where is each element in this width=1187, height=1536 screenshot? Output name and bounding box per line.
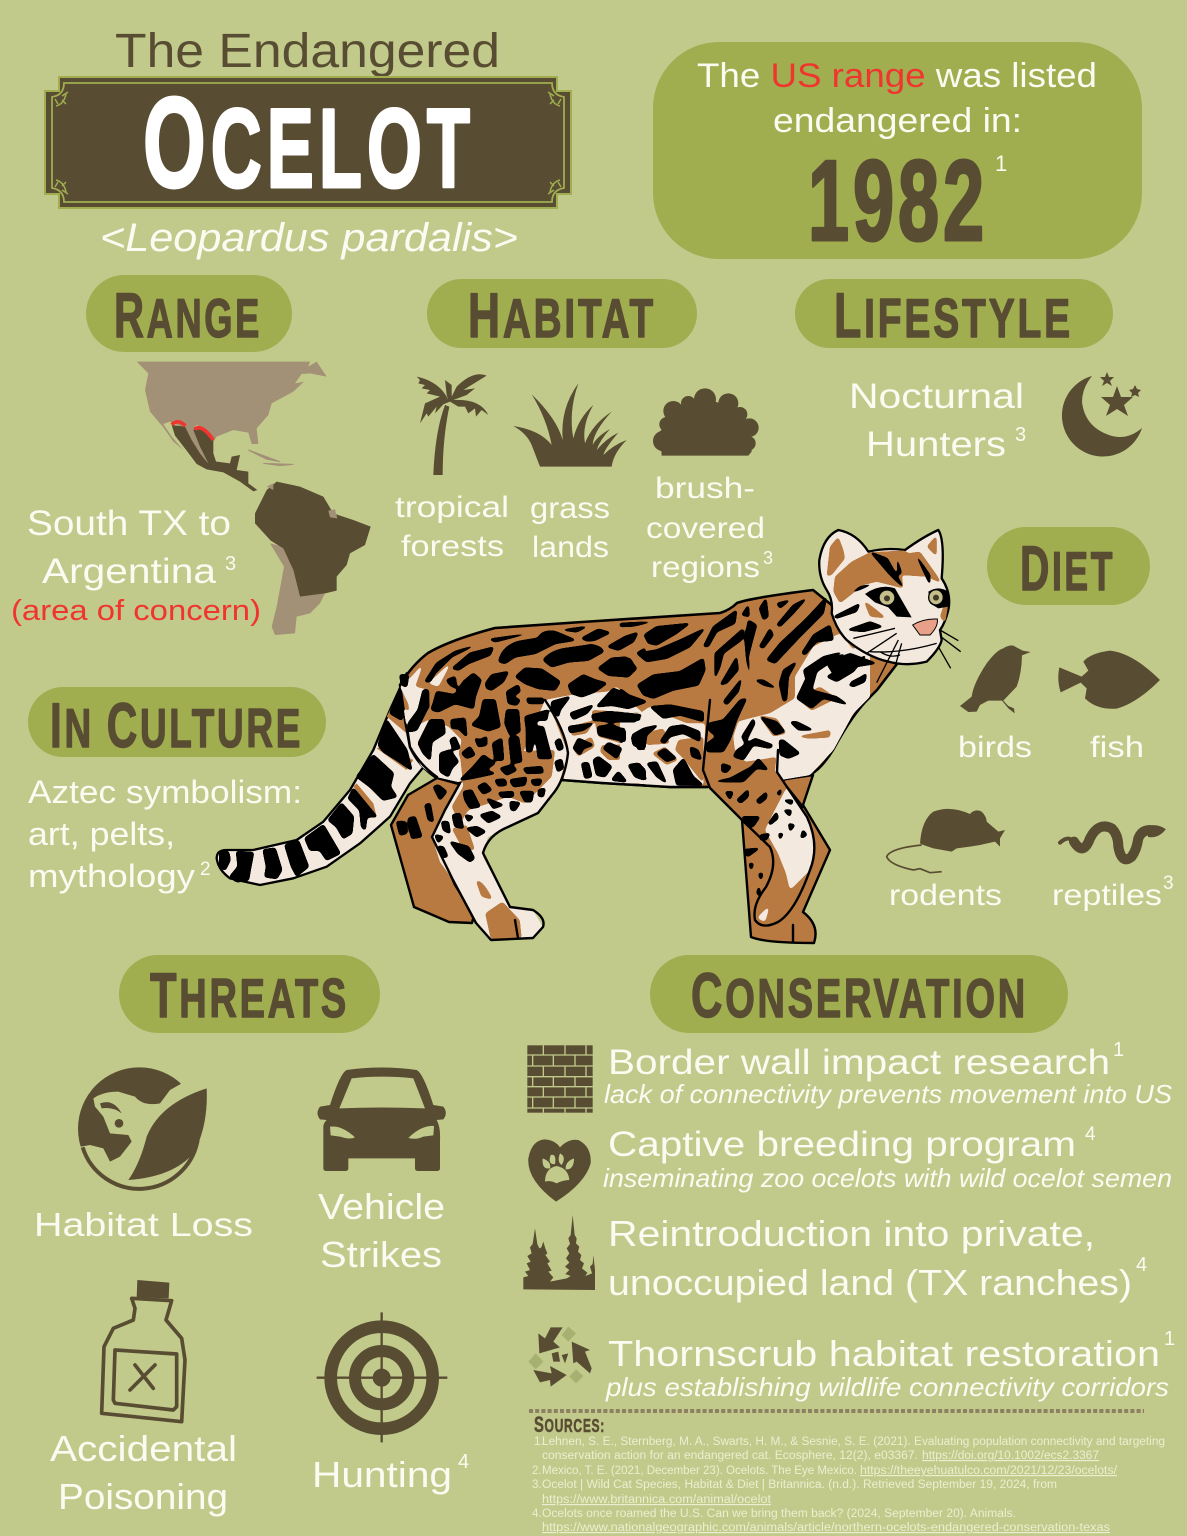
culture text: mythology (28, 858, 195, 894)
sources: 3. (532, 1479, 542, 1491)
heading: Diet: DIET (1020, 534, 1115, 604)
icon: rodent (887, 809, 1005, 873)
icon: moon and stars (1062, 372, 1142, 457)
diet labels: fish (1090, 731, 1144, 764)
diet labels: rodents (889, 879, 1002, 912)
lifestyle text: Hunters (866, 425, 1006, 464)
panel: listing year: 1 (995, 151, 1007, 176)
conservation list: Thornscrub habitat restoration (608, 1333, 1160, 1374)
black rosettes: front half (620, 597, 870, 840)
diet labels: 3 (1163, 873, 1174, 894)
sources: Mexico, T. E. (2021, December 23). Ocelots. The Eye Mexico. (542, 1465, 857, 1477)
threat labels: Poisoning (58, 1476, 228, 1517)
lifestyle text: 3 (1015, 424, 1026, 446)
far hind leg (391, 778, 474, 923)
near hind leg (432, 700, 568, 940)
threat labels: 4 (458, 1451, 469, 1473)
panel: listing year: 1982 (808, 138, 988, 265)
chest cream (733, 633, 870, 780)
culture text: Aztec symbolism: (28, 774, 302, 810)
near fore leg (703, 770, 815, 927)
threat labels: Habitat Loss (34, 1206, 253, 1243)
sources: 1. (534, 1436, 544, 1448)
conservation list: inseminating zoo ocelots with wild ocelot semen (603, 1163, 1172, 1193)
conservation list: 1 (1164, 1328, 1175, 1350)
heading: Threats: THREATS (150, 961, 349, 1031)
heading: Lifestyle: LIFESTYLE (834, 281, 1073, 351)
far fore leg (742, 775, 830, 943)
conservation list: lack of connectivity prevents movement into US (604, 1079, 1173, 1109)
eyes (865, 587, 912, 617)
title banner: OCELOT (143, 72, 475, 215)
conservation list: Captive breeding program (608, 1125, 1076, 1164)
thigh and leg brown patches (452, 750, 555, 850)
sources: 4. (532, 1508, 542, 1520)
panel: listing year (653, 42, 1142, 265)
mouth and whiskers (853, 628, 961, 683)
belly right cream (620, 707, 705, 787)
sources: https://www.nationalgeographic.com/animals/article/northern-ocelots-endangered-conservation-texas (542, 1522, 1110, 1534)
scientific name: <Leopardus pardalis> (100, 216, 518, 260)
culture text: art, pelts, (28, 816, 175, 852)
range text (11, 504, 261, 627)
panel: listing year: endangered in: (773, 102, 1022, 140)
threat labels: Accidental (50, 1428, 237, 1469)
sources: SOURCES: (534, 1412, 605, 1437)
threat labels: Vehicle (318, 1186, 445, 1227)
black rosettes: rear half (397, 627, 647, 862)
lower foreleg spots (744, 830, 807, 897)
sources: Ocelots once roamed the U.S. Can we bring them back? (2024, September 20). Animals. (542, 1508, 1016, 1520)
range text: 3 (225, 553, 236, 575)
habitat labels: forests (401, 530, 504, 563)
icon: target (317, 1312, 447, 1442)
diet labels: reptiles (1052, 879, 1162, 912)
conservation list: unoccupied land (TX ranches) (608, 1262, 1132, 1303)
head stripes (803, 552, 930, 688)
conservation list: 4 (1136, 1254, 1147, 1276)
icon: recycle arrows (528, 1327, 592, 1387)
diet labels: birds (958, 731, 1032, 764)
lifestyle text (849, 377, 1026, 464)
map: range across the Americas (137, 362, 371, 635)
habitat labels (395, 472, 773, 584)
threat labels: Hunting (312, 1454, 452, 1495)
brown forehead (827, 535, 948, 623)
habitat labels: grass (530, 492, 610, 525)
icon: poison bottle (102, 1280, 185, 1422)
cream belly and rump patches (400, 662, 645, 783)
mexican plateau (183, 426, 210, 463)
habitat labels: covered (646, 512, 765, 545)
icon: pine trees (523, 1215, 595, 1290)
ocelot tail (217, 673, 427, 885)
conservation list: 1 (1113, 1039, 1124, 1061)
habitat labels: regions (651, 551, 760, 584)
title block (44, 25, 572, 260)
icon: palm tree (417, 374, 488, 475)
heading: In Culture: IN CULTURE (50, 691, 303, 761)
threat labels: Strikes (320, 1234, 442, 1275)
icon: bird (960, 646, 1031, 713)
culture text: 2 (200, 859, 211, 880)
sources: conservation action for an endangered cat. Ecosphere, 12(2), e03367. (542, 1450, 918, 1462)
sources: Ocelot | Wild Cat Species, Habitat & Diet | Britannica. (n.d.). Retrieved September 19, 2024, from (542, 1479, 1057, 1491)
icon: shrub (653, 388, 759, 456)
threat labels (34, 1186, 469, 1517)
range text: (area of concern) (11, 595, 261, 627)
ocelot head (803, 530, 961, 688)
title line: The Endangered: The Endangered (115, 25, 500, 78)
icon: fish (1058, 651, 1160, 709)
sources: https://theeyehuatulco.com/2021/12/23/ocelots/ (860, 1465, 1118, 1477)
conservation list (603, 1039, 1175, 1402)
ocelot body (400, 590, 900, 787)
diet labels (889, 731, 1174, 912)
heading: Range: RANGE (114, 281, 262, 351)
icon: snake (1060, 825, 1165, 859)
habitat labels: brush- (655, 472, 755, 505)
habitat labels: 3 (763, 548, 773, 568)
lifestyle text: Nocturnal (849, 377, 1024, 416)
icon: earth and leaf (73, 1067, 217, 1200)
icon: grass (513, 383, 627, 467)
sources: Lehnen, S. E., Sternberg, M. A., Swarts, H. M., & Sesnie, S. E. (2021). Evaluating population connectivity and targeting (542, 1436, 1165, 1448)
sources (532, 1412, 1165, 1534)
icon: brick wall (527, 1045, 593, 1113)
sources: 2. (532, 1465, 542, 1477)
heading: Threats (119, 955, 380, 1033)
icon: car (317, 1067, 446, 1171)
culture text (28, 774, 302, 894)
heading: Range (86, 275, 292, 352)
heading: Conservation (650, 955, 1068, 1033)
icon: heart with paw (528, 1139, 591, 1202)
habitat labels: lands (532, 531, 609, 564)
range text: Argentina (42, 552, 217, 591)
sources: https://doi.org/10.1002/ecs2.3367 (922, 1450, 1099, 1462)
conservation list: plus establishing wildlife connectivity corridors (605, 1372, 1169, 1402)
illustration: ocelot (217, 530, 961, 943)
conservation list: 4 (1085, 1124, 1096, 1145)
belly and chest brown patches (643, 687, 837, 783)
conservation list: Reintroduction into private, (608, 1213, 1095, 1254)
range text: South TX to (27, 504, 231, 543)
sources: https://www.britannica.com/animal/ocelot (542, 1494, 772, 1506)
nose (913, 619, 937, 635)
ocelot outline details (407, 700, 803, 942)
panel: listing year: The US range was listed (697, 57, 1097, 95)
heading: Habitat: HABITAT (468, 281, 656, 351)
conservation list: Border wall impact research (608, 1043, 1110, 1082)
heading: Conservation: CONSERVATION (691, 961, 1028, 1031)
belly brown halos (555, 710, 645, 773)
habitat labels: tropical (395, 491, 509, 524)
